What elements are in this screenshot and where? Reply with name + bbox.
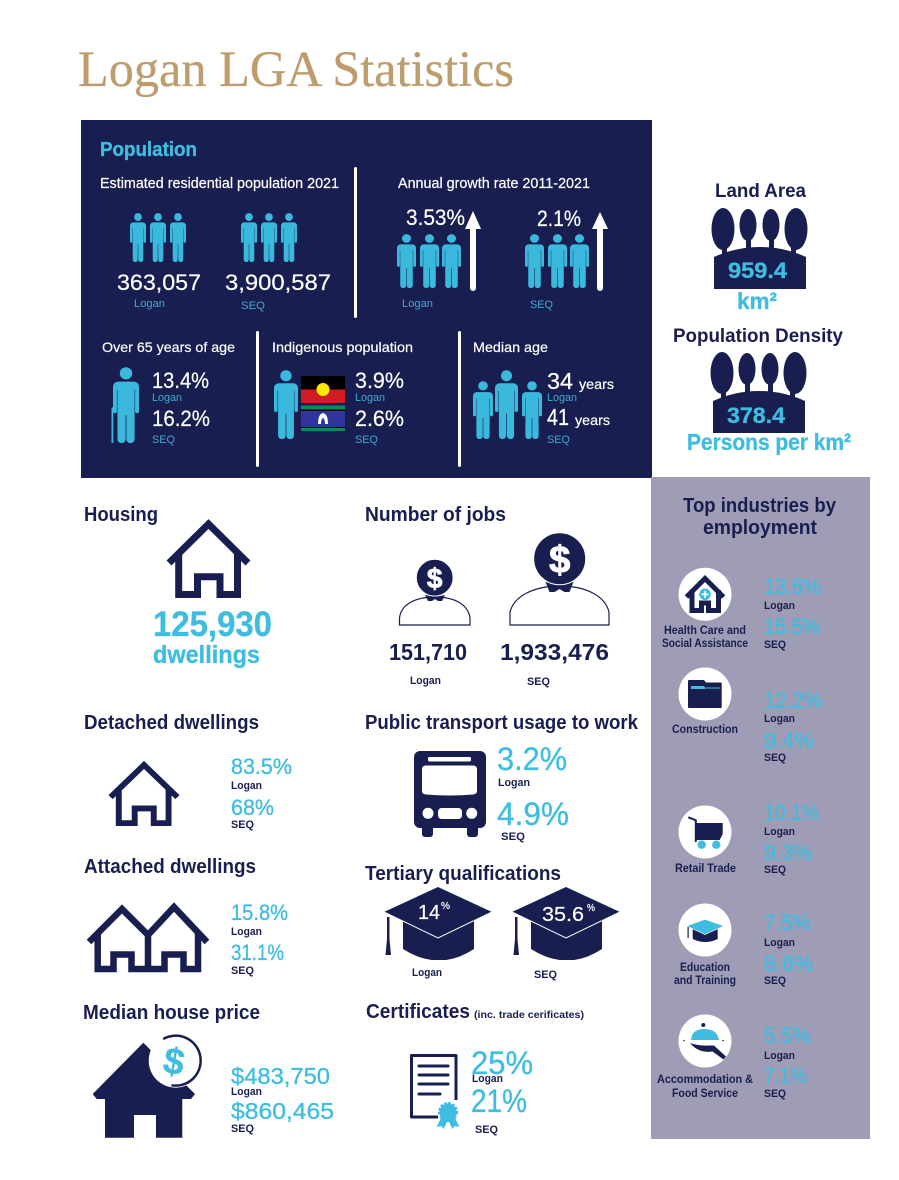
block: population density: Persons per km² — [687, 429, 851, 455]
block: estimated residential population: 363,057 — [117, 270, 201, 295]
block: public transport: SEQ — [501, 831, 525, 843]
block: land area: km² — [737, 288, 777, 314]
block: median house price: $483,750 — [231, 1063, 330, 1089]
block: tertiary qualifications: % — [587, 903, 595, 914]
block: number of jobs: 1,933,476 — [500, 639, 609, 665]
industry: health care: Social Assistance — [662, 638, 748, 650]
heading: population: Population — [100, 139, 197, 161]
block: public transport: Logan — [498, 777, 530, 789]
heading: top industries — [683, 495, 837, 539]
icon: house with dollar: $ — [160, 1040, 188, 1084]
block: detached dwellings: Detached dwellings — [84, 712, 259, 734]
industry: construction — [672, 668, 822, 764]
block: estimated residential population: 3,900,587 — [225, 270, 331, 295]
industry: education: Logan — [764, 937, 795, 949]
icon: worker small: $ — [427, 563, 443, 594]
block: median house price — [83, 1002, 334, 1138]
icon: attached houses — [89, 907, 207, 969]
title: Logan LGA Statistics — [78, 42, 514, 98]
block: detached dwellings: SEQ — [231, 819, 254, 831]
block: certificates: SEQ — [475, 1124, 498, 1136]
panel: top industries — [651, 477, 870, 1139]
block: certificates: (inc. trade cerificates) — [474, 1009, 584, 1021]
block: annual growth rate: 3.53% — [406, 205, 465, 230]
industry: education: 8.8% — [764, 951, 813, 976]
block: number of jobs — [365, 504, 609, 688]
block: over 65: Over 65 years of age — [102, 339, 235, 355]
icon: worker small — [400, 559, 470, 625]
block: indigenous population: Indigenous population — [272, 339, 413, 355]
industry: retail trade: Retail Trade — [675, 863, 736, 875]
block: housing: dwellings — [153, 641, 260, 669]
heading: top industries: employment — [703, 517, 817, 539]
industry: accommodation: Logan — [764, 1050, 795, 1062]
block: attached dwellings: Attached dwellings — [84, 856, 256, 878]
block: indigenous population: Logan — [355, 392, 385, 404]
icon: worker large: $ — [549, 540, 570, 582]
heading: top industries: Top industries by — [683, 495, 837, 517]
block: housing: Housing — [84, 504, 158, 526]
industry: construction: Logan — [764, 713, 795, 725]
block: attached dwellings — [84, 856, 288, 977]
industry: construction: SEQ — [764, 752, 786, 764]
block: median age: years — [575, 412, 610, 428]
block: certificates: Logan — [472, 1073, 503, 1085]
block: population density: 378.4 — [727, 403, 786, 428]
block: annual growth rate: Logan — [402, 298, 433, 310]
block: median age: 41 — [547, 404, 569, 430]
block: median age: years — [579, 376, 614, 392]
block: attached dwellings: Logan — [231, 926, 262, 938]
industry: retail trade: 10.1% — [764, 800, 819, 825]
block: certificates: Certificates — [366, 1001, 470, 1023]
industry: accommodation: Accommodation & — [657, 1074, 753, 1086]
block: detached dwellings: 68% — [231, 795, 274, 820]
block: over 65: Logan — [152, 392, 182, 404]
block: land area — [712, 181, 808, 314]
block: tertiary qualifications: Logan — [412, 967, 442, 979]
block: median age: Median age — [473, 339, 548, 355]
block: number of jobs: Number of jobs — [365, 504, 506, 526]
block: estimated residential population — [100, 176, 339, 312]
block: certificates: 25% — [471, 1045, 533, 1081]
block: population density — [673, 326, 851, 455]
block: tertiary qualifications — [365, 863, 620, 981]
icon: aboriginal flag — [301, 376, 345, 403]
block: certificates: 21% — [471, 1083, 527, 1119]
industry: education: Education — [680, 962, 730, 974]
block: annual growth rate — [397, 176, 608, 311]
block: public transport: 4.9% — [497, 796, 569, 832]
block: estimated residential population: Estimated residential population 2021 — [100, 176, 339, 192]
block: annual growth rate: 2.1% — [537, 206, 581, 231]
block: tertiary qualifications: 14 — [418, 902, 440, 924]
block: certificates — [366, 1001, 584, 1136]
icon: certificate — [412, 1056, 460, 1129]
block: housing — [84, 504, 272, 669]
block: median age — [473, 339, 614, 446]
block: median house price: Logan — [231, 1086, 262, 1098]
industry: education: SEQ — [764, 975, 786, 987]
block: median age: 34 — [547, 368, 573, 394]
block: attached dwellings: 31.1% — [231, 940, 284, 965]
block: tertiary qualifications: Tertiary qualifications — [365, 863, 561, 885]
icon: bus — [414, 751, 486, 837]
block: over 65: 13.4% — [152, 368, 209, 393]
industry: retail trade: SEQ — [764, 864, 786, 876]
icon: worker large — [510, 533, 609, 625]
industry: health care: Health Care and — [664, 625, 746, 637]
industry: retail trade: Logan — [764, 826, 795, 838]
industry: accommodation: SEQ — [764, 1088, 786, 1100]
industry: accommodation: 7.1% — [764, 1063, 807, 1088]
industry: health care: 15.5% — [764, 614, 820, 639]
block: detached dwellings: Logan — [231, 780, 262, 792]
block: tertiary qualifications: 35.6 — [542, 904, 584, 926]
block: public transport: 3.2% — [497, 741, 567, 777]
panel: population — [81, 120, 652, 478]
block: indigenous population: 2.6% — [355, 406, 404, 431]
industry: accommodation: 5.5% — [764, 1023, 811, 1048]
industry: accommodation — [657, 1014, 811, 1100]
industry: construction: 9.4% — [764, 728, 814, 753]
industry: health care: Logan — [764, 600, 795, 612]
industry: education: 7.5% — [764, 910, 811, 935]
industry: health care — [662, 568, 821, 651]
block: attached dwellings: SEQ — [231, 965, 254, 977]
block: median house price: $860,465 — [231, 1098, 334, 1124]
block: annual growth rate: SEQ — [530, 299, 553, 311]
industry: construction: Construction — [672, 724, 738, 736]
industry: accommodation: Food Service — [672, 1088, 738, 1100]
block: attached dwellings: 15.8% — [231, 900, 288, 925]
block: land area: Land Area — [715, 181, 806, 202]
block: estimated residential population: Logan — [134, 298, 165, 310]
block: indigenous population — [272, 339, 413, 446]
block: median house price: SEQ — [231, 1123, 254, 1135]
block: median house price: Median house price — [83, 1002, 260, 1024]
block: public transport: Public transport usage to work — [365, 712, 639, 734]
industry: education: and Training — [674, 975, 736, 987]
block: annual growth rate: Annual growth rate 2011-2021 — [398, 176, 590, 192]
block: detached dwellings: 83.5% — [231, 754, 292, 779]
block: land area: 959.4 — [728, 258, 788, 283]
block: over 65: SEQ — [152, 434, 175, 446]
industry: retail trade: 9.3% — [764, 840, 812, 865]
block: indigenous population: 3.9% — [355, 368, 404, 393]
block: housing: 125,930 — [153, 605, 272, 644]
block: estimated residential population: SEQ — [241, 300, 265, 312]
block: population density: Population Density — [673, 326, 843, 347]
industry: health care: SEQ — [764, 639, 786, 651]
block: over 65 — [102, 339, 235, 446]
block: tertiary qualifications: SEQ — [534, 969, 557, 981]
industry: construction: 12.2% — [764, 688, 822, 713]
block: median age: Logan — [547, 392, 577, 404]
block: detached dwellings — [84, 712, 292, 831]
block: indigenous population: SEQ — [355, 434, 378, 446]
industry: education — [674, 904, 813, 987]
icon: torres strait islander flag — [301, 406, 345, 431]
block: number of jobs: 151,710 — [389, 639, 467, 665]
icon: house with dollar — [93, 1034, 203, 1138]
block: public transport — [365, 712, 639, 843]
industry: health care: 13.6% — [764, 574, 821, 599]
block: over 65: 16.2% — [152, 406, 210, 431]
block: tertiary qualifications: % — [441, 901, 450, 912]
block: number of jobs: SEQ — [527, 676, 550, 688]
industry: retail trade — [675, 800, 819, 876]
block: number of jobs: Logan — [410, 675, 441, 687]
block: median age: SEQ — [547, 434, 570, 446]
